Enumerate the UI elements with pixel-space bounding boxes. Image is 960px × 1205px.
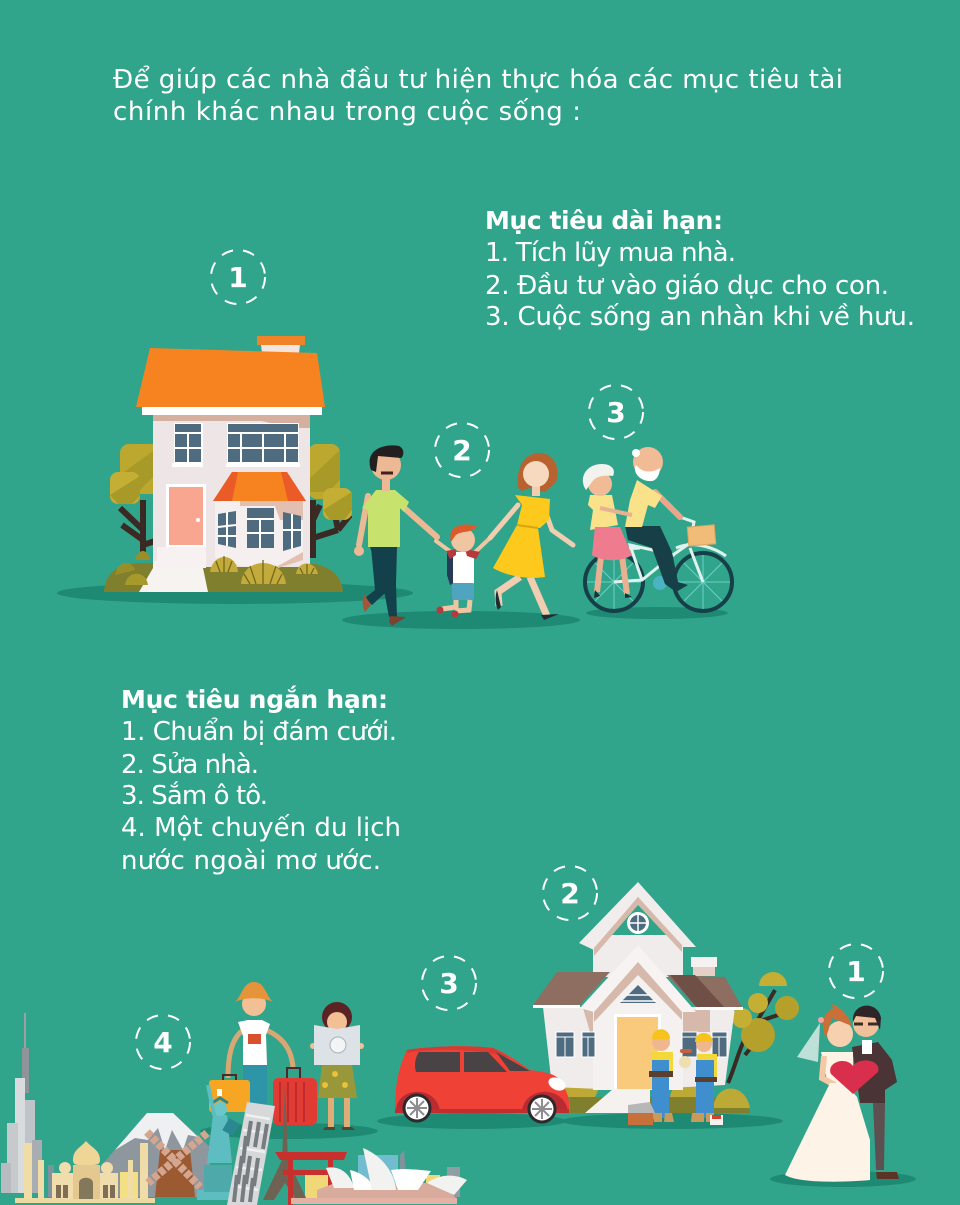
badge: short-term 4: 4 [153, 1026, 173, 1059]
badge: long-term 1 [211, 250, 265, 304]
front gable [580, 945, 710, 1090]
ground [104, 563, 343, 592]
porch roof [213, 472, 306, 501]
right tree [308, 444, 352, 558]
toolbox [628, 1102, 723, 1125]
text block: long-term goals: 3. Cuộc sống an nhàn khi về hưu. [485, 302, 915, 332]
text block: long-term goals [485, 206, 915, 332]
windows [556, 1032, 727, 1057]
windows [415, 1052, 530, 1072]
text block: long-term goals: 1. Tích lũy mua nhà. [485, 238, 736, 268]
badge: short-term 1: 1 [846, 955, 866, 988]
text block: short-term goals: 2. Sửa nhà. [121, 750, 259, 780]
car body [395, 1046, 569, 1112]
badge: long-term 3: 3 [606, 396, 626, 429]
red suitcase [273, 1068, 317, 1125]
father [354, 445, 437, 626]
upper storey [579, 882, 696, 977]
text block: long-term goals: Mục tiêu dài hạn: [485, 206, 723, 235]
Mount Fuji [100, 1113, 210, 1197]
Statue of Liberty [197, 1085, 240, 1200]
roof [136, 348, 325, 407]
ground [570, 1097, 750, 1113]
yellow suitcase [209, 1075, 250, 1112]
traveller woman [310, 1002, 364, 1130]
bushes [115, 551, 318, 585]
badge: long-term 1: 1 [228, 261, 248, 294]
grandmother [583, 464, 632, 598]
illustration: young family [342, 445, 580, 629]
text block: short-term goals: Mục tiêu ngắn hạn: [121, 685, 388, 714]
Eiffel Tower [263, 1083, 307, 1200]
text block: short-term goals: 4. Một chuyến du lịch [121, 813, 401, 843]
house wall [153, 415, 310, 567]
badge: long-term 2 [435, 423, 489, 477]
door [166, 484, 206, 548]
Burj Khalifa skyscraper [1, 1013, 42, 1193]
illustration: renovated house with workers [533, 882, 799, 1129]
walkway [139, 568, 208, 592]
background city buildings [48, 1150, 460, 1198]
chimney [691, 957, 717, 976]
badge: short-term 4 [136, 1015, 190, 1069]
badge: short-term 3 [422, 956, 476, 1010]
text block: short-term goals: nước ngoài mơ ước. [121, 846, 381, 876]
wheel arches and wheels [395, 1092, 569, 1122]
illustration: red car [377, 1046, 569, 1129]
intro text: Để giúp các nhà đầu tư hiện thực hóa các mục tiêu tài [113, 64, 843, 95]
side roofs [533, 972, 743, 1010]
bicycle [584, 517, 733, 612]
badge: short-term 3: 3 [439, 967, 459, 1000]
headlight [546, 1075, 568, 1093]
intro text: chính khác nhau trong cuộc sống : [113, 97, 581, 127]
text block: short-term goals: 3. Sắm ô tô. [121, 780, 268, 811]
intro text [113, 64, 843, 127]
bride [785, 1004, 870, 1182]
badge: long-term 3 [589, 385, 643, 439]
upper windows [172, 423, 300, 467]
left tree [110, 444, 160, 560]
illustration: travelling couple [200, 982, 378, 1139]
text block: short-term goals [121, 685, 401, 876]
badge: short-term 1 [829, 944, 883, 998]
Sydney Opera House [291, 1148, 467, 1204]
badge: short-term 2: 2 [560, 877, 580, 910]
grandfather [625, 447, 688, 592]
badge: short-term 2 [543, 866, 597, 920]
bushes [552, 1068, 750, 1108]
torii gate [275, 1152, 347, 1205]
walkway [585, 1089, 650, 1113]
traveller man [228, 982, 293, 1106]
Taj Mahal [15, 1141, 155, 1203]
illustration: bride and groom [770, 1004, 916, 1187]
heart [830, 1060, 878, 1094]
groom [852, 1006, 899, 1179]
Pisa tower [227, 1102, 275, 1205]
worker right [679, 1033, 717, 1122]
bay window [215, 501, 303, 568]
main wall [543, 1007, 735, 1089]
windmill [147, 1132, 207, 1197]
tree [728, 972, 799, 1083]
badge: long-term 2: 2 [452, 434, 472, 467]
mother [490, 453, 573, 620]
chimney [257, 336, 305, 353]
door [614, 1014, 661, 1089]
boy [436, 525, 490, 618]
illustration: world landmarks [1, 1013, 467, 1205]
steps [153, 547, 206, 568]
illustration: house with orange roof [57, 336, 413, 604]
veil [797, 1023, 820, 1062]
text block: short-term goals: 1. Chuẩn bị đám cưới. [121, 716, 397, 747]
text block: long-term goals: 2. Đầu tư vào giáo dục cho con. [485, 271, 889, 301]
illustration: grandparents on bicycle [583, 447, 733, 619]
worker left [649, 1029, 674, 1122]
